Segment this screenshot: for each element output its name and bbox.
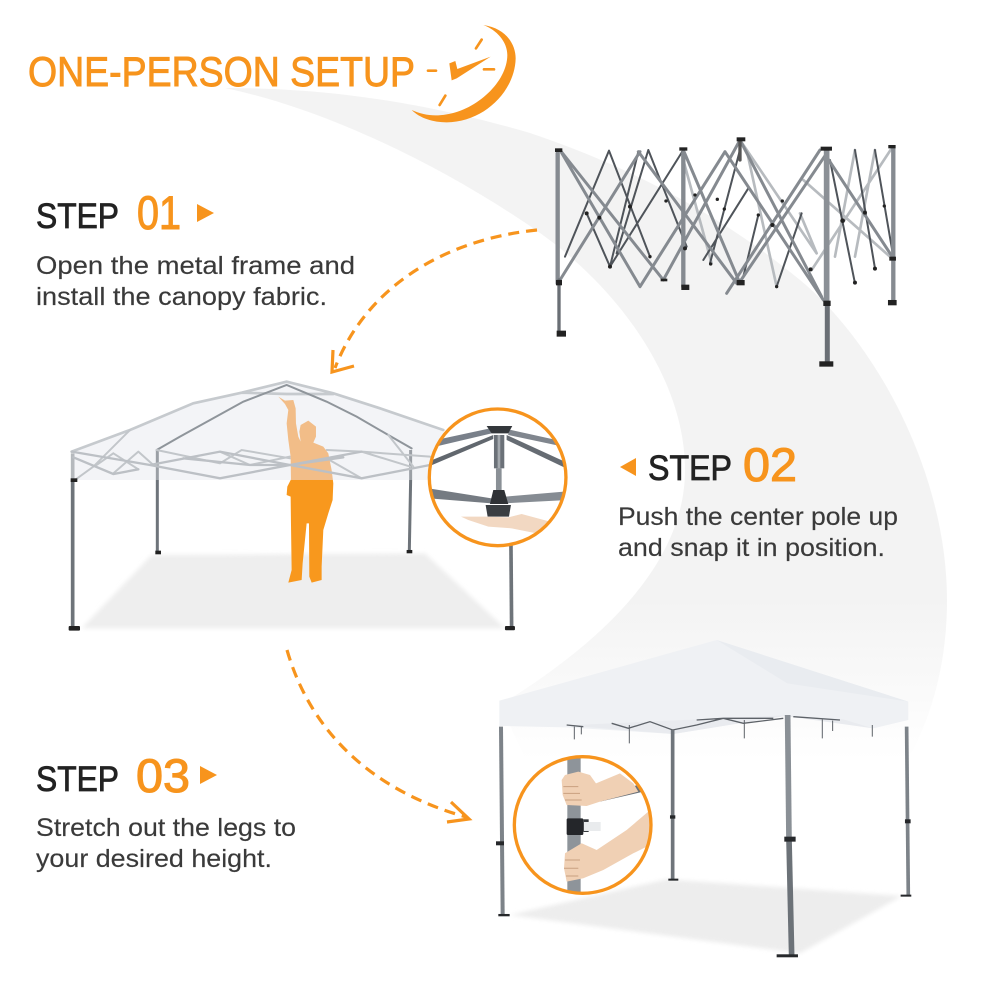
canopy right slope <box>717 640 908 702</box>
step 1 heading <box>36 186 214 239</box>
step 2 heading: 02 <box>743 438 797 491</box>
canopy top <box>499 640 908 734</box>
legs <box>73 450 512 628</box>
step 1 heading: 01 <box>137 186 181 239</box>
feet <box>69 478 515 631</box>
step 1 text: Open the metal frame and <box>36 252 355 280</box>
dashed arrow: step 1 to step 2 <box>332 230 537 372</box>
finished canopy tent <box>496 640 911 957</box>
underside frame <box>567 717 872 743</box>
ground shadow <box>82 553 505 628</box>
step 1 text: install the canopy fabric. <box>36 283 327 311</box>
step 2 text: and snap it in position. <box>618 534 885 562</box>
step 1 text <box>36 252 355 311</box>
detail circle: stretching legs <box>514 755 653 895</box>
front scissor bars <box>72 452 430 478</box>
detail circle: center pole <box>428 409 568 546</box>
pale canopy area <box>73 382 443 480</box>
title: ONE-PERSON SETUP <box>28 48 415 95</box>
step 3 heading <box>36 749 217 802</box>
step 3 heading: 03 <box>136 749 190 802</box>
step 3 text: Stretch out the legs to <box>36 814 296 842</box>
step 2 heading <box>620 438 797 491</box>
background swoosh band <box>225 88 947 830</box>
step 3 heading: STEP <box>36 760 119 799</box>
roof and back scissor frame <box>72 382 443 480</box>
dashed arrow: step 2 to step 3 <box>287 650 469 822</box>
step 2 text: Push the center pole up <box>618 503 898 531</box>
step 3 text: your desired height. <box>36 845 272 873</box>
person silhouette <box>278 397 333 583</box>
folded metal frame <box>555 137 897 367</box>
step 1 heading: STEP <box>36 197 119 236</box>
icon: clock with check mark <box>412 25 516 122</box>
ground shadow <box>510 879 902 953</box>
legs <box>501 715 908 955</box>
canopy underside <box>567 715 873 734</box>
step 2 heading: STEP <box>648 449 732 488</box>
leg clamps and feet <box>496 815 911 957</box>
step 2 text <box>618 503 898 562</box>
open frame with person <box>69 382 515 631</box>
step 3 text <box>36 814 296 873</box>
